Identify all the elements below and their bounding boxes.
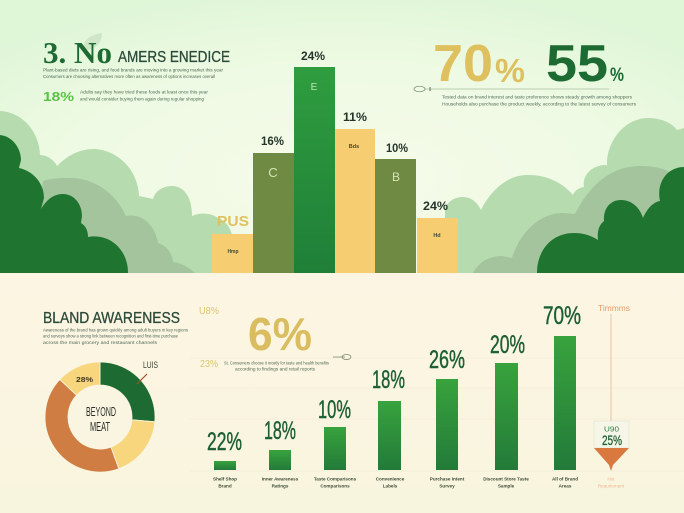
title number: 3. No [43,35,112,70]
background: upper panel [0,0,684,273]
stat: 55%: 55 [546,35,608,93]
bar tag: PUS: PUS [217,213,249,230]
bar 26%: Purchase Intent [430,476,465,482]
donut value: 28% [76,375,93,384]
bar 70%: Areas [559,484,572,488]
bar 18% second: Labels [383,484,398,488]
bar 22%: Shelf Shop [213,476,237,482]
bar 18% second [372,366,405,488]
bar 18% [262,417,299,488]
bar 22%: Brand [218,484,232,488]
donut callout: LUIS [143,360,158,370]
bar 3: E [311,82,318,93]
bar 26% [429,346,465,488]
bar 26%: 26% [429,346,465,374]
bar 22%: 22% [207,428,242,456]
heading: brand awareness: BLAND AWARENESS [43,310,180,327]
bar 22% [207,428,242,488]
stat: 70% [433,35,525,93]
callout pointer [594,448,629,471]
bar value: 16%: 16% [261,134,284,148]
bar value: 10%: 10% [386,141,408,155]
bar value: 11%: 11% [343,110,367,124]
bar 20%: Sample [498,484,515,488]
bar 4: Bds [349,144,359,150]
awareness description: Awareness of the brand has grown quickly among adult buyers in key regions [43,328,189,332]
bar 5 [375,159,416,273]
bar 20%: 20% [490,331,525,359]
heading block: top left [43,33,230,104]
stat description [224,360,330,372]
background: lower panel [0,273,684,513]
bar 1: Hmp [227,249,239,255]
callout caption: Requirement [598,484,625,488]
bar value: 24%: 24% [301,49,325,63]
callout box: 25% [602,432,622,448]
callout heading: Timmms [598,304,630,313]
callout box [594,421,629,448]
bar 1 [212,234,253,273]
stat description: according to findings and retail reports [235,366,316,372]
bar 70% [543,302,581,488]
stat: small top: U8% [199,306,219,317]
bar 18%: Inner Awareness [262,476,299,482]
dark tree layer, right [537,167,684,273]
bar 3 [294,67,335,273]
left tree cluster [0,111,232,273]
segment: yellow lower [111,420,155,469]
bar 20% [483,331,529,488]
bar 70%: 70% [543,302,581,330]
stats description [442,94,637,106]
heading: brand awareness [43,310,189,345]
callout caption [598,476,625,488]
awareness description: across the main grocery and restaurant channels [43,340,158,345]
bar 18% second: Convenience [376,476,405,482]
intro text: Plant-based diets are rising, and food brands are moving into a growing market this year [43,68,223,72]
stats description: Tested data on brand interest and taste preference shows steady growth among shoppers [442,94,633,100]
bar 10%: 10% [318,396,351,424]
stat description [80,90,208,102]
stat block: 6% [199,306,351,372]
bar 5: B [392,170,400,184]
title words: AMERS ENEDICE [118,49,230,66]
stat description: and would consider buying them again during regular shopping [80,96,204,102]
bar 18% second: 18% [372,366,405,394]
bar 6: Hd [433,233,441,239]
callout caption: Not [607,476,615,482]
bar 18%: Ratings [272,484,289,488]
bar chart: lower [207,302,581,488]
bar 10% [314,396,357,488]
light tree layer, left [0,111,232,273]
bar 10%: Comparisons [320,484,350,488]
bar 18%: 18% [264,417,296,445]
callout stem [610,314,612,421]
donut chart [45,360,158,472]
bar 70%: All of Brand [552,476,578,482]
bar chart: upper [212,49,458,273]
bar 2 [253,153,294,273]
donut center label [86,405,116,434]
segment: green [100,362,155,422]
icon: pointer [333,354,351,360]
stat: 70%: % [495,52,525,89]
light tree layer, right [445,118,684,273]
awareness description [43,328,189,345]
stat description: Adults say they have tried these foods at least once this year [80,90,208,94]
bar 4 [335,129,375,273]
callout: timeline marker [594,304,630,488]
right tree cluster [445,118,684,273]
mid tree layer, right [473,166,684,273]
segment: orange [45,380,119,472]
intro text: Consumers are choosing alternatives more often as awareness of options increases overall [43,74,215,79]
bar 2: C [268,165,278,180]
stat: 70%: 70 [433,35,493,93]
bar 6 [417,218,458,273]
stats block: top right [414,35,637,106]
stat: 6%: 6% [248,308,312,360]
bar 20%: Discount Store Taste [483,476,529,482]
intro text [43,68,223,79]
stat: 23%: 23% [200,359,218,370]
mid tree layer, left [30,178,195,273]
donut center label: BEYOND [86,405,116,419]
donut center label: MEAT [90,420,110,434]
stat description: St. Consumers choose it mostly for taste and health benefits [224,360,330,366]
bar value: 24% right: 24% [423,199,448,213]
icon: leaf [84,33,102,50]
bar 26%: Survey [439,484,455,488]
stat: 18%: 18% [43,89,75,104]
bar 10%: Taste Comparisons [314,476,357,482]
dark tree layer, left [0,135,128,273]
awareness description: and surveys show a strong link between recognition and first-time purchase [43,334,178,338]
stats description: Households also purchase the product weekly, according to the latest survey of consumers [442,102,637,106]
segment: yellow upper [60,362,100,395]
icon: pointer line [414,86,609,92]
callout box: U90 [604,424,619,434]
stat: 55%: % [610,65,624,86]
